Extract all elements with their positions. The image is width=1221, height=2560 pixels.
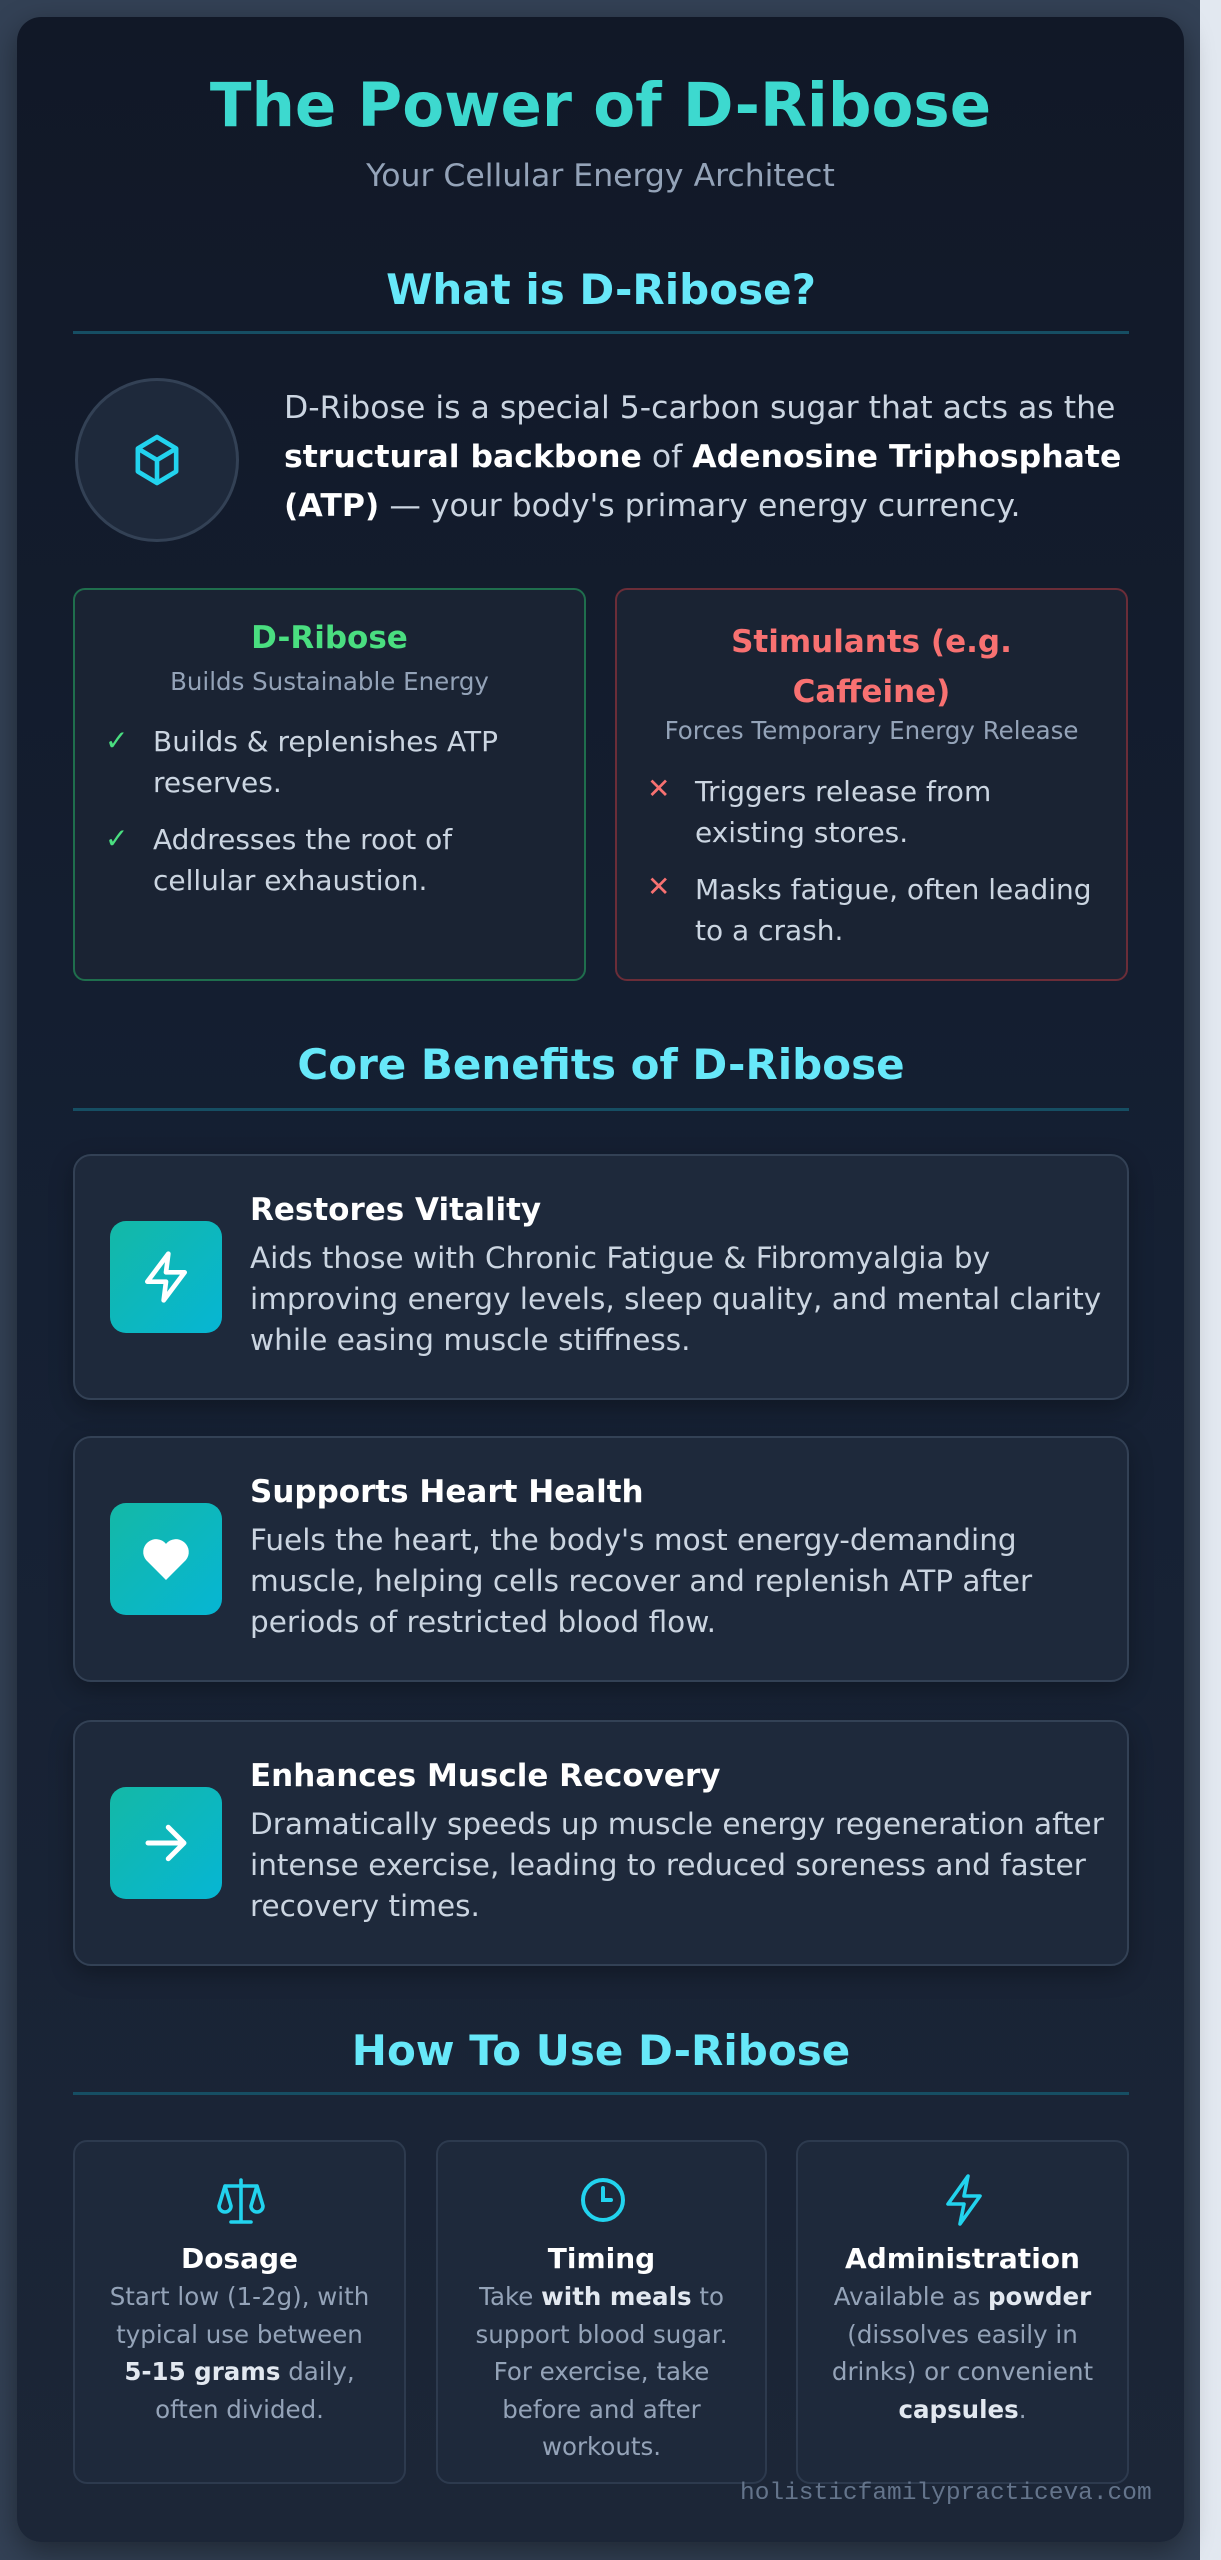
panel: D-Ribose: ✓ (105, 822, 128, 855)
card: timing: Take with meals to support blood sugar. For exercise, take before and after workouts. (476, 2282, 728, 2461)
panel: D-Ribose (73, 588, 586, 981)
benefit: muscle: Enhances Muscle Recovery (250, 1758, 720, 1794)
panel: D-Ribose: Addresses the root of cellular exhaustion. (153, 823, 452, 897)
subtitle: Your Cellular Energy Architect (366, 158, 835, 194)
heading: core benefits: Core Benefits of D-Ribose (297, 1040, 905, 1089)
icon: cube circle (75, 378, 239, 542)
panel: stimulants: Masks fatigue, often leading to a crash. (695, 873, 1092, 947)
heading: what is: What is D-Ribose? (386, 265, 816, 314)
heading: how to use: How To Use D-Ribose (352, 2026, 850, 2075)
panel: stimulants: Stimulants (e.g. (731, 624, 1012, 660)
benefit: heart: Supports Heart Health (250, 1474, 644, 1510)
benefit: muscle (73, 1720, 1129, 1966)
panel: stimulants: ✕ (647, 870, 670, 903)
panel: stimulants: Caffeine) (793, 674, 950, 710)
benefit: heart: Fuels the heart, the body's most energy-demanding muscle, helping cells recover and replenish ATP after periods of restricted blood flow. (250, 1523, 1032, 1639)
card: administration: Administration (845, 2242, 1080, 2275)
card: administration: Available as powder (dissolves easily in drinks) or convenient capsules. (832, 2282, 1093, 2424)
card: administration (796, 2140, 1129, 2484)
panel: stimulants: ✕ (647, 772, 670, 805)
intro text: D-Ribose is a special 5-carbon sugar that acts as the structural backbone of Adenosine Triphosphate (ATP) — your body's primary energy currency. (284, 390, 1121, 524)
panel: D-Ribose: Builds & replenishes ATP reserves. (153, 725, 498, 799)
card: dosage: Dosage (181, 2242, 298, 2275)
card: dosage (73, 2140, 406, 2484)
watermark: holisticfamilypracticeva.com (740, 2480, 1152, 2507)
title: The Power of D-Ribose (210, 70, 991, 141)
panel: D-Ribose: Builds Sustainable Energy (170, 667, 489, 696)
benefit: vitality: Restores Vitality (250, 1192, 541, 1228)
benefit: vitality: Aids those with Chronic Fatigue & Fibromyalgia by improving energy levels, sleep quality, and mental clarity while easing muscle stiffness. (250, 1241, 1101, 1357)
panel: D-Ribose: ✓ (105, 724, 128, 757)
card: timing (436, 2140, 767, 2484)
panel: stimulants: Triggers release from existing stores. (695, 775, 991, 849)
benefit: heart (73, 1436, 1129, 1682)
benefit: muscle: Dramatically speeds up muscle energy regeneration after intense exercise, leading to reduced soreness and faster recovery times. (250, 1807, 1104, 1923)
benefit: vitality (73, 1154, 1129, 1400)
card: timing: Timing (548, 2242, 655, 2275)
panel: stimulants (615, 588, 1128, 981)
panel: stimulants: Forces Temporary Energy Release (665, 716, 1078, 745)
card: dosage: Start low (1-2g), with typical use between 5-15 grams daily, often divided. (110, 2282, 369, 2424)
panel: D-Ribose: D-Ribose (251, 620, 408, 656)
